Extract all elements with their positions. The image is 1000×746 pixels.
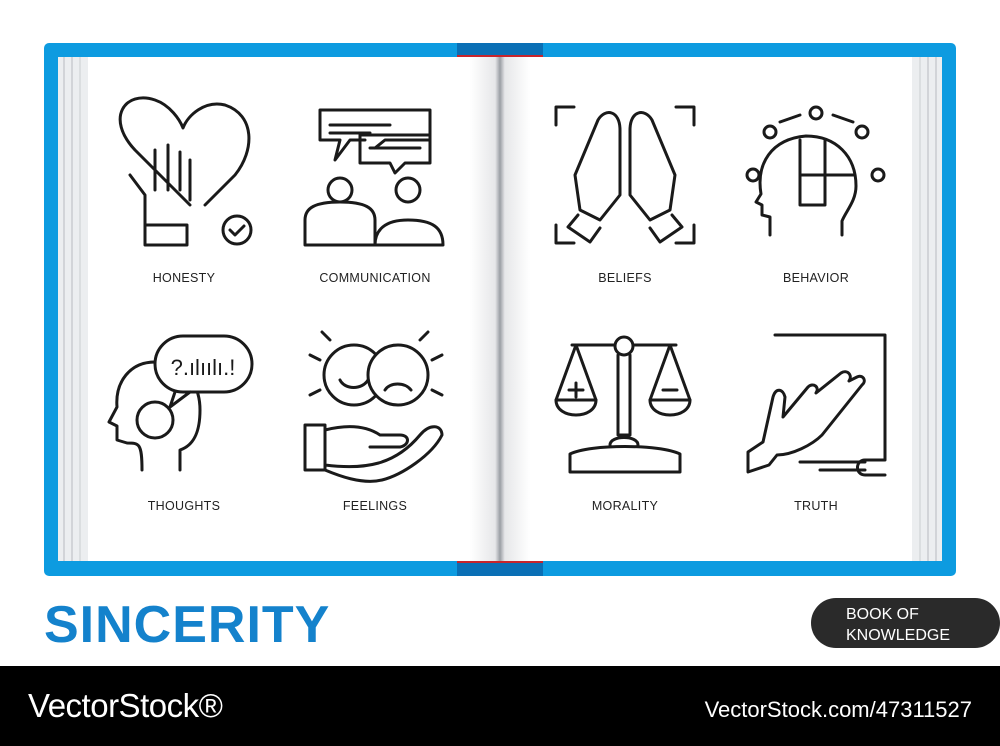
icon: feelings [305, 332, 442, 481]
icon: thoughts [109, 336, 252, 470]
footer bar: VectorStock.com/47311527 [705, 697, 972, 722]
badge: KNOWLEDGE [846, 627, 950, 644]
book pages [58, 57, 942, 561]
icon: morality [556, 337, 690, 472]
icon: communication [305, 110, 443, 245]
icon: honesty [120, 98, 251, 245]
badge: BOOK OF [846, 606, 919, 623]
labels: HONESTY [153, 271, 216, 285]
labels: BEHAVIOR [783, 271, 849, 285]
labels: FEELINGS [343, 499, 407, 513]
icon: beliefs [556, 107, 694, 243]
labels: MORALITY [592, 499, 659, 513]
footer bar: VectorStock® [28, 687, 223, 724]
icon: behavior [747, 107, 884, 235]
labels: TRUTH [794, 499, 838, 513]
thought bubble text: ?.ılıılı.! [171, 355, 235, 380]
labels: BELIEFS [598, 271, 652, 285]
labels: COMMUNICATION [319, 271, 431, 285]
footer bar [0, 666, 1000, 746]
badge [811, 598, 1000, 648]
labels: THOUGHTS [148, 499, 220, 513]
title: SINCERITY [44, 596, 330, 654]
book cover [44, 43, 956, 576]
icon: truth [748, 335, 885, 475]
labels [148, 271, 849, 513]
